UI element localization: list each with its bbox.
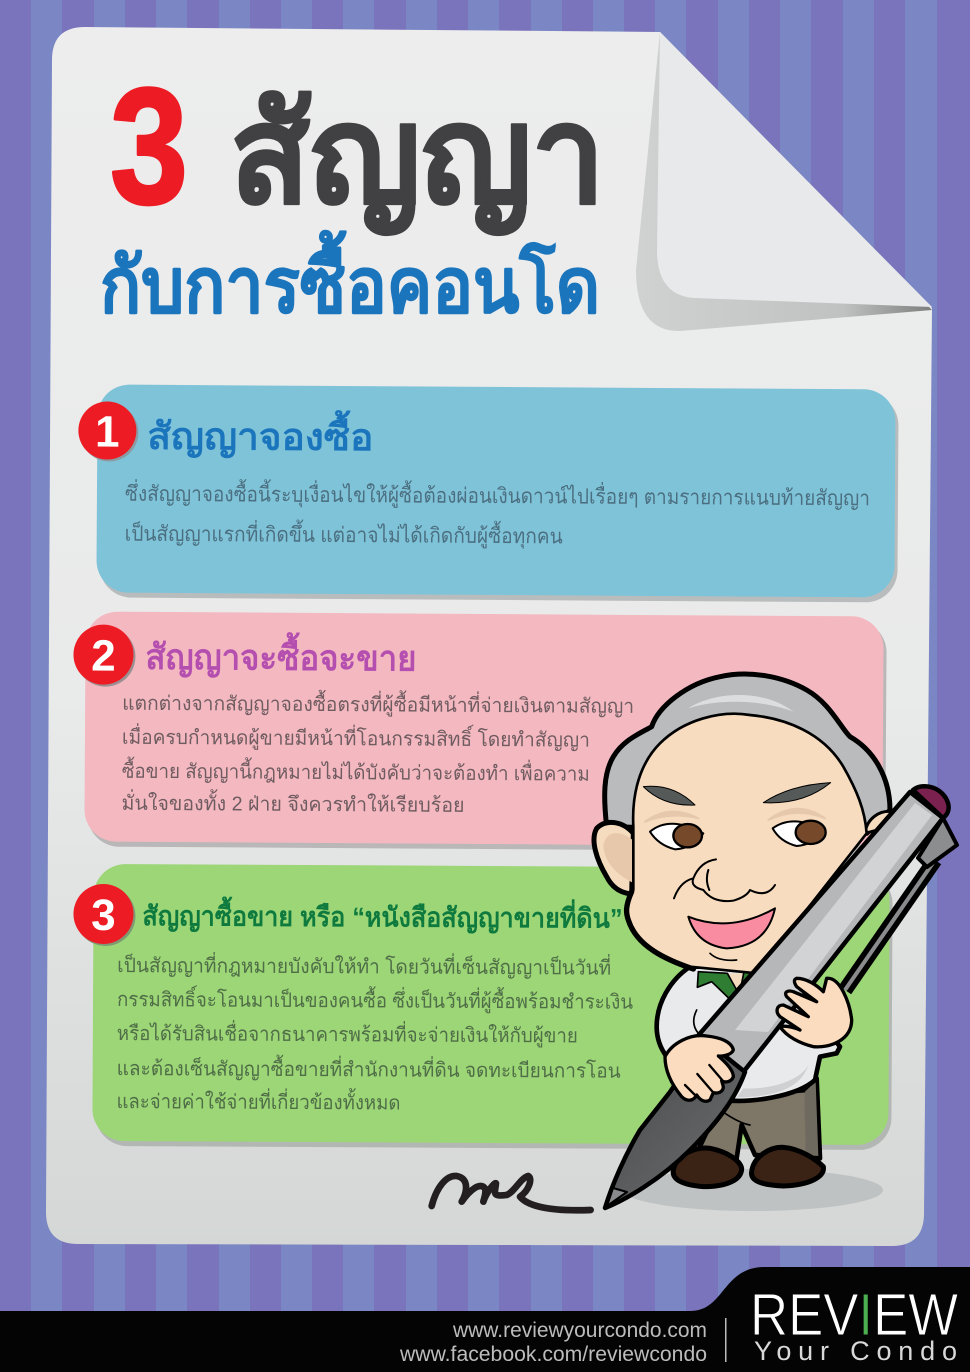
card 3 body: และต้องเซ็นสัญญาซื้อขายที่สำนักงานที่ดิน จดทะเบียนการโอน xyxy=(117,1054,621,1083)
card 1 body: เป็นสัญญาแรกที่เกิดขึ้น แต่อาจไม่ได้เกิดกับผู้ซื้อทุกคน xyxy=(125,519,563,549)
footer divider xyxy=(725,1318,726,1362)
eyelid shading xyxy=(645,809,825,822)
website URLs: www.reviewyourcondo.com xyxy=(452,1319,707,1342)
card 2 body: แตกต่างจากสัญญาจองซื้อตรงที่ผู้ซื้อมีหน้าที่จ่ายเงินตามสัญญา xyxy=(122,689,634,719)
title word: สัญญา xyxy=(230,79,605,236)
logo: REVIEW xyxy=(750,1282,958,1348)
jaw outline xyxy=(627,892,693,969)
title number 3: 3 xyxy=(110,54,188,238)
card 3 body: และจ่ายค่าใช้จ่ายที่เกี่ยวข้องทั้งหมด xyxy=(116,1087,401,1115)
eyebrow right xyxy=(763,783,831,803)
mouth xyxy=(688,908,775,948)
card 2 body: เมื่อครบกำหนดผู้ขายมีหน้าที่โอนกรรมสิทธิ์ โดยทำสัญญา xyxy=(122,722,590,753)
pen cap xyxy=(913,786,949,818)
character: old man holding a giant pen xyxy=(594,674,957,1211)
footer xyxy=(0,1267,970,1372)
footer band xyxy=(0,1267,970,1372)
card 3 body xyxy=(116,951,634,1116)
hands xyxy=(665,978,852,1101)
number badge 1 xyxy=(78,401,139,462)
title xyxy=(100,54,605,329)
card 1 heading: สัญญาจองซื้อ xyxy=(147,409,373,459)
card 1 body xyxy=(125,479,870,551)
body xyxy=(657,967,840,1187)
eyebrow left xyxy=(643,786,695,805)
hair xyxy=(605,674,890,833)
number badge 1: 1 xyxy=(95,407,120,457)
pen xyxy=(605,786,957,1208)
card 2 body: ซื้อขาย สัญญานี้กฎหมายไม่ได้บังคับว่าจะต้องทำ เพื่อความ xyxy=(122,757,590,786)
number badge 3: 3 xyxy=(91,891,116,940)
hand upper xyxy=(777,978,852,1047)
right ear xyxy=(865,811,892,833)
panel: card 2 xyxy=(72,611,887,852)
shoes xyxy=(673,1147,823,1187)
pen end block xyxy=(918,818,957,867)
hair highlight xyxy=(688,695,793,712)
website URLs: www.facebook.com/reviewcondo xyxy=(399,1343,707,1366)
face xyxy=(627,714,867,973)
website URLs xyxy=(399,1319,707,1366)
pen clip xyxy=(845,860,935,990)
ground shadow xyxy=(623,1169,883,1211)
head xyxy=(594,674,892,973)
chin line xyxy=(710,953,737,960)
pen lower section xyxy=(605,1040,745,1208)
number badge 3 xyxy=(73,884,136,946)
panel: card 1 xyxy=(77,384,899,602)
nose and cheek lines xyxy=(674,859,775,901)
card 3 body: เป็นสัญญาที่กฎหมายบังคับให้ทำ โดยวันที่เซ็นสัญญาเป็นวันที่ xyxy=(117,951,611,980)
card 3 body: กรรมสิทธิ์จะโอนมาเป็นของคนซื้อ ซึ่งเป็นวันที่ผู้ซื้อพร้อมชำระเงิน xyxy=(117,984,633,1015)
eye right xyxy=(773,821,826,846)
logo: Your Condo xyxy=(754,1336,957,1366)
pen nib xyxy=(607,1188,627,1206)
card 2 heading: สัญญาจะซื้อจะขาย xyxy=(145,631,417,680)
shirt xyxy=(657,967,840,1101)
number badge 2: 2 xyxy=(91,632,116,681)
trousers xyxy=(697,1078,820,1158)
card 2 body: มั่นใจของทั้ง 2 ฝ่าย จึงควรทำให้เรียบร้อย xyxy=(121,789,465,817)
card 1 body: ซึ่งสัญญาจองซื้อนี้ระบุเงื่อนไขให้ผู้ซื้อต้องผ่อนเงินดาวน์ไปเรื่อยๆ ตามรายการแนบท้ายสัญญา xyxy=(125,479,870,511)
card 3 heading: สัญญาซื้อขาย หรือ “หนังสือสัญญาขายที่ดิน” xyxy=(142,895,623,935)
panel: card 3 xyxy=(72,864,893,1150)
hand lower xyxy=(665,1036,733,1101)
eye left xyxy=(650,824,703,849)
signature xyxy=(432,1176,591,1210)
card 2 body xyxy=(121,689,634,818)
card 3 body: หรือได้รับสินเชื่อจากธนาคารพร้อมที่จะจ่ายเงินให้กับผู้ขาย xyxy=(117,1019,578,1048)
left ear xyxy=(594,822,634,894)
pen barrel xyxy=(690,792,943,1080)
subtitle: กับการซื้อคอนโด xyxy=(100,230,600,329)
shirt collar xyxy=(697,972,753,1000)
number badge 2 xyxy=(73,624,136,687)
